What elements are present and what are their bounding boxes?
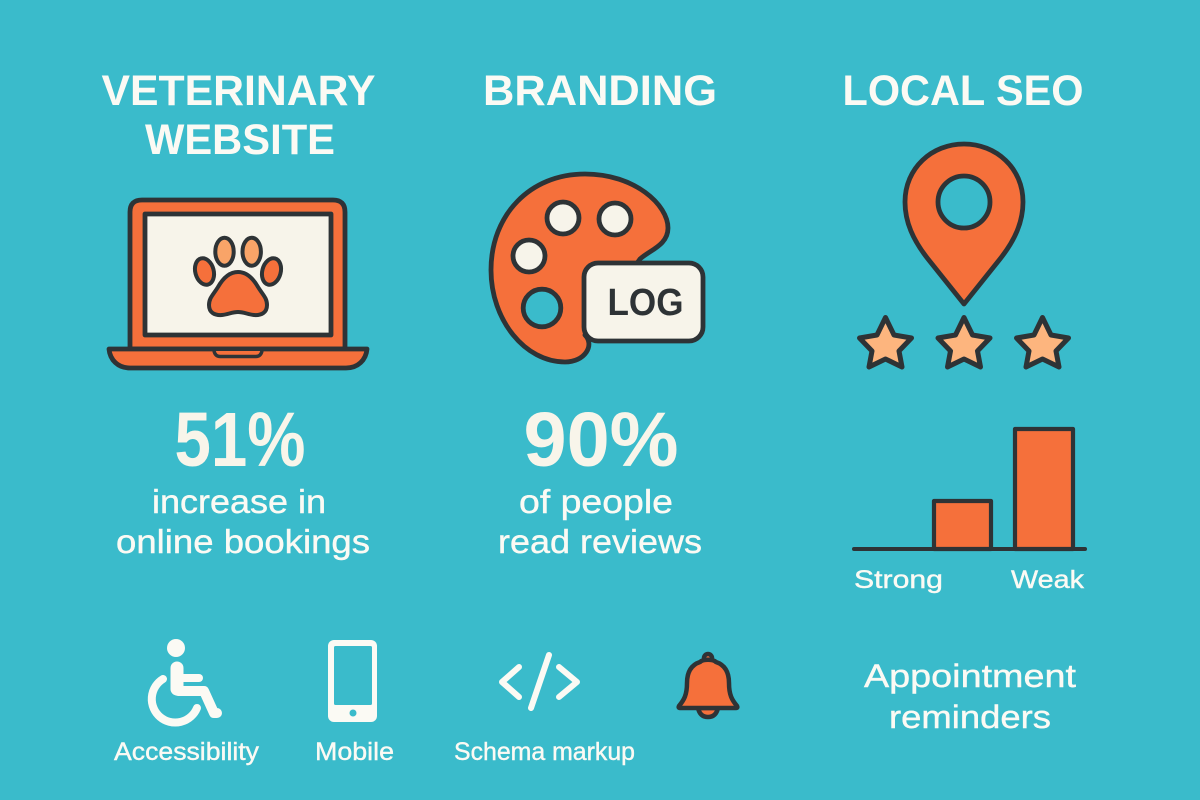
text: appointment reminders: reminders <box>889 699 1051 735</box>
bar chart: strong vs weak: Strong <box>854 566 943 594</box>
title: veterinary website: WEBSITE <box>145 116 335 164</box>
title: branding: BRANDING <box>483 67 717 115</box>
bar chart: strong vs weak <box>854 429 1085 594</box>
bar chart: strong vs weak: Weak <box>1011 566 1085 594</box>
label: mobile: Mobile <box>315 738 394 766</box>
icon: mobile phone <box>328 640 377 722</box>
stat: 51%: online bookings <box>116 523 370 560</box>
stat: 51%: increase in <box>152 483 326 520</box>
stat: 51% <box>116 397 370 560</box>
label: schema markup: Schema markup <box>454 738 635 766</box>
icon: bell <box>679 654 737 717</box>
stat: 90% <box>498 397 702 560</box>
stat: 90%: 90% <box>524 397 678 483</box>
title: local SEO: LOCAL SEO <box>842 67 1084 115</box>
icon: code brackets <box>502 655 577 708</box>
label: accessibility: Accessibility <box>114 738 260 766</box>
logo label: LOG <box>608 282 684 324</box>
stat: 90%: read reviews <box>498 523 702 560</box>
icon: map pin <box>905 144 1023 304</box>
stat: 90%: of people <box>519 483 673 520</box>
title: veterinary website: VETERINARY <box>102 67 376 115</box>
text: appointment reminders: Appointment <box>864 658 1076 694</box>
icon: laptop with paw <box>109 200 367 368</box>
icon: palette with logo <box>491 174 703 362</box>
icon: three stars <box>860 318 1068 367</box>
stat: 51%: 51% <box>174 397 306 483</box>
icon: accessibility <box>152 639 217 723</box>
text: appointment reminders <box>864 658 1076 735</box>
title: veterinary website <box>102 67 376 164</box>
